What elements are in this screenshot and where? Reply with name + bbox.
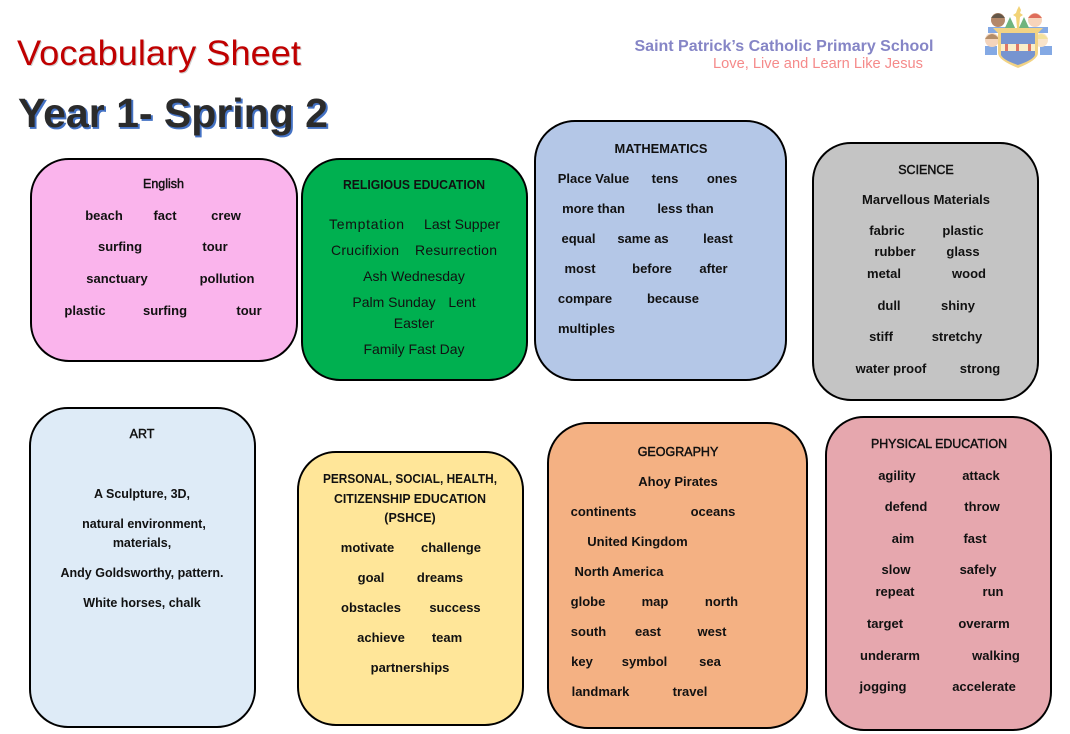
word list: Mathematics: less than	[657, 201, 714, 216]
word list: PSHCE: goal	[358, 570, 384, 585]
word list: PSHCE: obstacles	[341, 600, 401, 615]
title: Vocabulary Sheet: Vocabulary Sheet	[18, 35, 302, 74]
word list: Science: dull	[877, 298, 901, 313]
word list: Geography: travel	[673, 684, 707, 699]
word list: Mathematics: compare	[558, 291, 612, 306]
word list: Mathematics: least	[703, 231, 733, 246]
word list: Mathematics: before	[632, 261, 672, 276]
word list: English: tour	[202, 239, 228, 254]
word list: Mathematics: Place Value	[558, 171, 629, 186]
word list: Science: glass	[946, 244, 980, 259]
word list: PSHCE: motivate	[341, 540, 394, 555]
word list: Physical Education: aim	[892, 531, 914, 546]
heading: Mathematics: MATHEMATICS	[614, 142, 708, 156]
word list: Physical Education: attack	[962, 468, 1001, 483]
word list: Religious Education: Temptation	[329, 216, 404, 232]
word list: Art: materials,	[113, 536, 171, 550]
word list: Physical Education: run	[983, 584, 1004, 599]
word list: Geography: continents	[571, 504, 636, 519]
word list: Physical Education: jogging	[859, 679, 907, 694]
word list: Geography: landmark	[572, 684, 630, 699]
word list: Geography: map	[642, 594, 668, 609]
word list: Physical Education: slow	[882, 562, 911, 577]
school motto: Love, Live and Learn Like Jesus	[713, 56, 923, 72]
word list: Religious Education: Easter	[394, 315, 435, 331]
word list: PSHCE: partnerships	[371, 660, 449, 675]
word list: English: beach	[85, 208, 123, 223]
word list: Science: stiff	[869, 329, 894, 344]
heading: English: English	[143, 177, 184, 191]
word list: Religious Education: Resurrection	[415, 242, 497, 258]
word list: Geography: oceans	[691, 504, 735, 519]
word list: Science: rubber	[874, 244, 916, 259]
panel: Religious Education	[302, 159, 527, 380]
word list: Geography: North America	[574, 564, 664, 579]
school name: Saint Patrick’s Catholic Primary School	[634, 38, 934, 55]
word list: Physical Education: throw	[964, 499, 1001, 514]
word list: English	[64, 208, 262, 318]
word list: English: pollution	[200, 271, 254, 286]
word list: Geography: south	[571, 624, 606, 639]
word list: English: surfing	[143, 303, 187, 318]
panel: English	[31, 159, 297, 361]
word list: Geography: east	[635, 624, 662, 639]
word list: English: crew	[211, 208, 242, 223]
word list: Science: water proof	[855, 361, 927, 376]
word list: PSHCE: achieve	[357, 630, 405, 645]
word list: Religious Education: Ash Wednesday	[363, 268, 465, 284]
word list: Physical Education: agility	[878, 468, 917, 483]
word list: Geography: symbol	[622, 654, 667, 669]
heading: Religious Education: RELIGIOUS EDUCATION	[343, 178, 485, 192]
word list: Mathematics: more than	[562, 201, 625, 216]
word list: Science: shiny	[941, 298, 976, 313]
word list: English: tour	[236, 303, 262, 318]
panel: Geography	[548, 423, 807, 728]
word list: Science: metal	[867, 266, 901, 281]
word list: Geography: north	[705, 594, 738, 609]
word list: Religious Education: Last Supper	[424, 216, 500, 232]
word list: Science: plastic	[942, 223, 984, 238]
subheading: Marvellous Materials: Marvellous Materials	[862, 192, 990, 207]
word list: Physical Education: repeat	[875, 584, 915, 599]
word list: Physical Education: defend	[885, 499, 927, 514]
heading: Science: SCIENCE	[898, 163, 954, 177]
word list: Art: A Sculpture, 3D,	[94, 487, 190, 501]
word list: PSHCE: success	[429, 600, 481, 615]
word list: Mathematics: tens	[652, 171, 678, 186]
heading: PSHCE: (PSHCE)	[384, 511, 436, 525]
word list: Physical Education	[859, 468, 1020, 694]
panel: PSHCE	[298, 452, 523, 725]
heading: PSHCE	[323, 472, 497, 525]
word list: Physical Education: safely	[960, 562, 997, 577]
word list: Art: Andy Goldsworthy, pattern.	[61, 566, 223, 580]
word list: English: plastic	[64, 303, 106, 318]
word list: Physical Education: walking	[971, 648, 1020, 663]
word list: Art: natural environment,	[82, 517, 206, 531]
heading: Year 1- Spring 2: Year 1- Spring 2	[20, 92, 330, 138]
word list: Physical Education: underarm	[860, 648, 920, 663]
word list: Mathematics: same as	[617, 231, 669, 246]
word list: Geography: west	[697, 624, 727, 639]
word list: Science: strong	[960, 361, 1000, 376]
word list: English: surfing	[98, 239, 142, 254]
word list: PSHCE	[341, 540, 481, 675]
word list: Science: fabric	[869, 223, 905, 238]
word list: Religious Education: Crucifixion	[331, 242, 399, 258]
word list: Geography: sea	[699, 654, 722, 669]
word list: Mathematics: most	[564, 261, 596, 276]
word list: Geography	[571, 504, 738, 699]
word list: PSHCE: team	[432, 630, 462, 645]
heading: Geography: GEOGRAPHY	[638, 445, 719, 459]
title: Vocabulary Sheet: Vocabulary Sheet	[17, 34, 301, 73]
word list: Mathematics: ones	[707, 171, 737, 186]
word list: Physical Education: fast	[963, 531, 987, 546]
panel: Mathematics	[535, 121, 786, 380]
word list: English: fact	[153, 208, 177, 223]
word list: Science: wood	[951, 266, 986, 281]
word list: PSHCE: dreams	[417, 570, 463, 585]
word list: English: sanctuary	[86, 271, 148, 286]
word list: Mathematics: equal	[562, 231, 595, 246]
word list: Art: White horses, chalk	[83, 596, 201, 610]
word list: Geography: key	[571, 654, 594, 669]
word list: Religious Education: Family Fast Day	[363, 341, 465, 357]
word list: Religious Education: Palm Sunday	[352, 294, 436, 310]
word list: Mathematics: after	[699, 261, 728, 276]
word list: Religious Education: Lent	[448, 294, 476, 310]
panel: Science	[813, 143, 1038, 400]
word list: Religious Education	[329, 216, 500, 357]
panel: Physical Education	[826, 417, 1051, 730]
word list: Art	[61, 487, 223, 610]
panel: Art	[30, 408, 255, 727]
heading: PSHCE: CITIZENSHIP EDUCATION	[334, 492, 486, 506]
word list: Mathematics	[558, 171, 737, 336]
icon: school crest with children	[985, 6, 1052, 68]
word list: PSHCE: challenge	[421, 540, 481, 555]
heading: Year 1- Spring 2: Year 1- Spring 2	[18, 90, 328, 136]
heading: Art: ART	[130, 427, 155, 441]
word list: Geography: United Kingdom	[587, 534, 688, 549]
word list: Science	[855, 223, 1000, 376]
word list: Physical Education: target	[867, 616, 904, 631]
word list: Geography: globe	[571, 594, 605, 609]
word list: Physical Education: accelerate	[952, 679, 1016, 694]
word list: Physical Education: overarm	[958, 616, 1010, 631]
word list: Mathematics: because	[647, 291, 699, 306]
word list: Science: stretchy	[932, 329, 983, 344]
word list: Mathematics: multiples	[558, 321, 615, 336]
heading: PSHCE: PERSONAL, SOCIAL, HEALTH,	[323, 472, 497, 486]
subheading: Ahoy Pirates: Ahoy Pirates	[638, 474, 718, 489]
heading: Physical Education: PHYSICAL EDUCATION	[871, 437, 1007, 451]
